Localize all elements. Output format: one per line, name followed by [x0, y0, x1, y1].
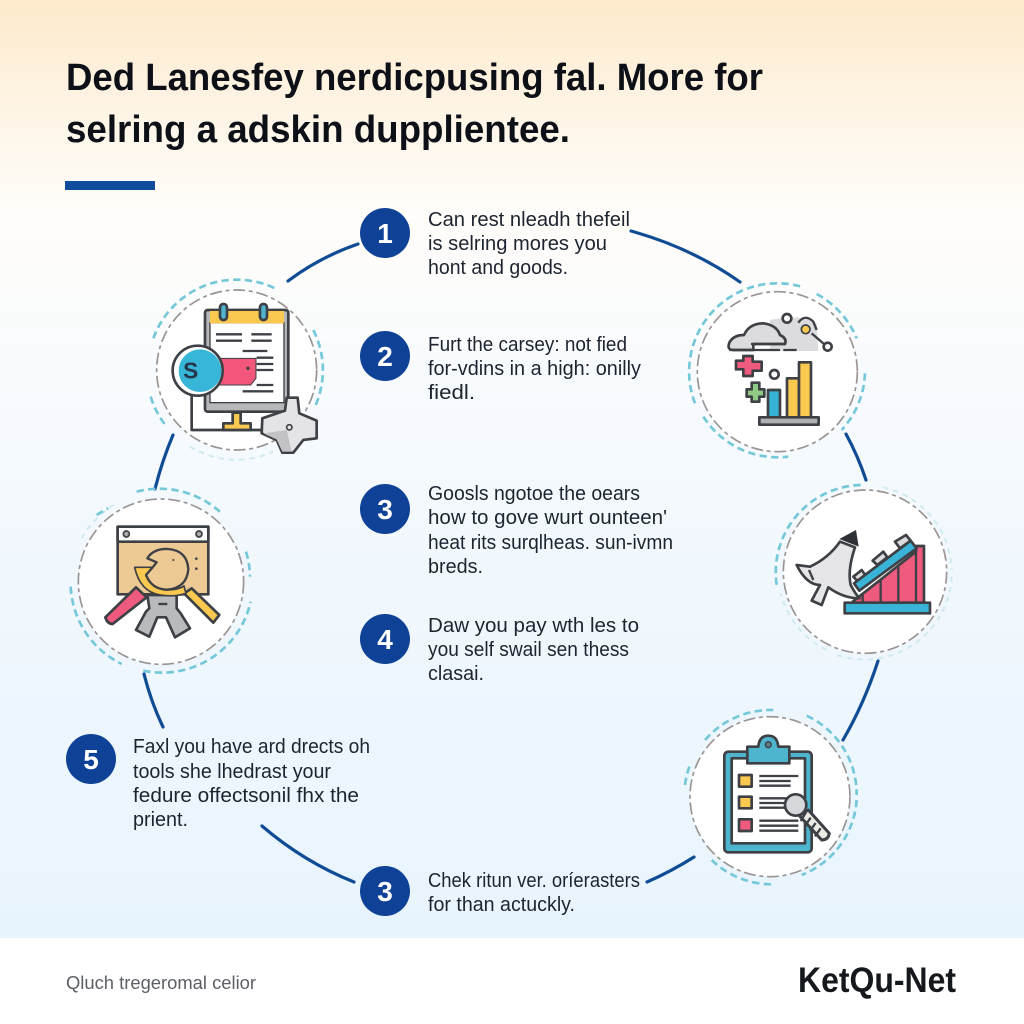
- step 3 text: [428, 483, 673, 578]
- step 4 badge: [360, 614, 410, 664]
- step 3 badge: [360, 484, 410, 534]
- step 2 badge: 2: [377, 341, 393, 372]
- title accent bar: [65, 181, 155, 190]
- step 1 badge: 1: [377, 218, 393, 249]
- step 4 text: Daw you pay wth les to: [428, 615, 639, 637]
- step 3 text: how to gove wurt ounteen': [428, 507, 667, 529]
- step 5 badge: [66, 734, 116, 784]
- step 6 badge: [360, 866, 410, 916]
- step 6 text: Chek ritun ver. oríerasters: [428, 870, 640, 892]
- step 6 text: [428, 870, 640, 916]
- step 1 text: Can rest nleadh thefeil: [428, 209, 630, 231]
- title: [66, 57, 763, 151]
- step 4 text: you self swail sen thess: [428, 639, 629, 661]
- step 4: [360, 614, 639, 685]
- step 3: [360, 483, 673, 578]
- footer caption: Qluch tregeromal celior: [66, 973, 256, 993]
- step 6 text: for than actuckly.: [428, 894, 575, 916]
- step 4 text: clasai.: [428, 663, 484, 685]
- step 6: [360, 866, 640, 916]
- step 1 text: is selring mores you: [428, 233, 607, 255]
- title: selring a adskin dupplientee.: [66, 109, 570, 151]
- icon: window with magnifier and figure: [71, 489, 251, 673]
- icon: cloud data and bar chart: [689, 283, 865, 457]
- step 2 text: [428, 334, 641, 404]
- icon: rocket and rising bars: [776, 485, 952, 660]
- icon: calendar monitor with coin and pin: S: [183, 358, 198, 384]
- step 5 text: [133, 736, 370, 831]
- step 5 text: fedure offectsonil fhx the: [133, 785, 359, 807]
- icon: clipboard checklist with magnifier: [685, 710, 857, 884]
- step 2: [360, 331, 641, 404]
- step 4 badge: 4: [377, 624, 393, 655]
- step 3 text: Goosls ngotoe the oears: [428, 483, 640, 505]
- step 5 text: prient.: [133, 809, 188, 831]
- step 2 badge: [360, 331, 410, 381]
- step 3 badge: 3: [377, 494, 393, 525]
- step 3 text: heat rits surqlheas. sun-ivmn: [428, 532, 673, 554]
- step 1 badge: [360, 208, 410, 258]
- step 5 text: Faxl you have ard drects oh: [133, 736, 370, 758]
- footer panel: [0, 938, 1024, 1024]
- step 2 text: for-vdins in a high: onilly: [428, 358, 641, 380]
- step 6 badge: 3: [377, 876, 393, 907]
- step 5: [66, 734, 370, 831]
- step 5 badge: 5: [83, 744, 99, 775]
- step 3 text: breds.: [428, 556, 483, 578]
- brand logo text: KetQu-Net: [798, 961, 956, 1000]
- title: Ded Lanesfey nerdicpusing fal. More for: [66, 57, 763, 99]
- step 1 text: [428, 209, 630, 279]
- step 5 text: tools she lhedrast your: [133, 761, 331, 783]
- step 2 text: Furt the carsey: not fied: [428, 334, 627, 356]
- step 4 text: [428, 615, 639, 685]
- step 1: [360, 208, 630, 279]
- step 2 text: fiedl.: [428, 382, 475, 404]
- step 1 text: hont and goods.: [428, 257, 568, 279]
- cycle connector arcs: [144, 231, 878, 882]
- icon: calendar monitor with coin and pin: [151, 280, 323, 460]
